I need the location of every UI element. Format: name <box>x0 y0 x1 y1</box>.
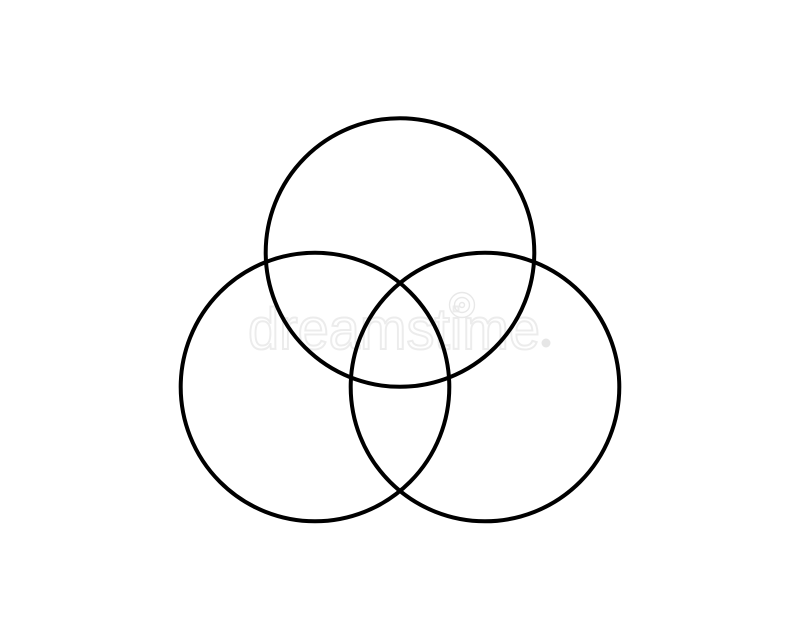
circle: bottom left <box>181 253 449 521</box>
watermark dot <box>542 338 550 348</box>
venn diagram <box>181 118 619 521</box>
watermark spiral icon <box>450 292 474 318</box>
circle: top <box>266 118 534 387</box>
watermark wordmark: dreamstime <box>248 297 540 362</box>
circle: bottom right <box>351 253 619 521</box>
watermark: dreamstime <box>248 292 550 362</box>
